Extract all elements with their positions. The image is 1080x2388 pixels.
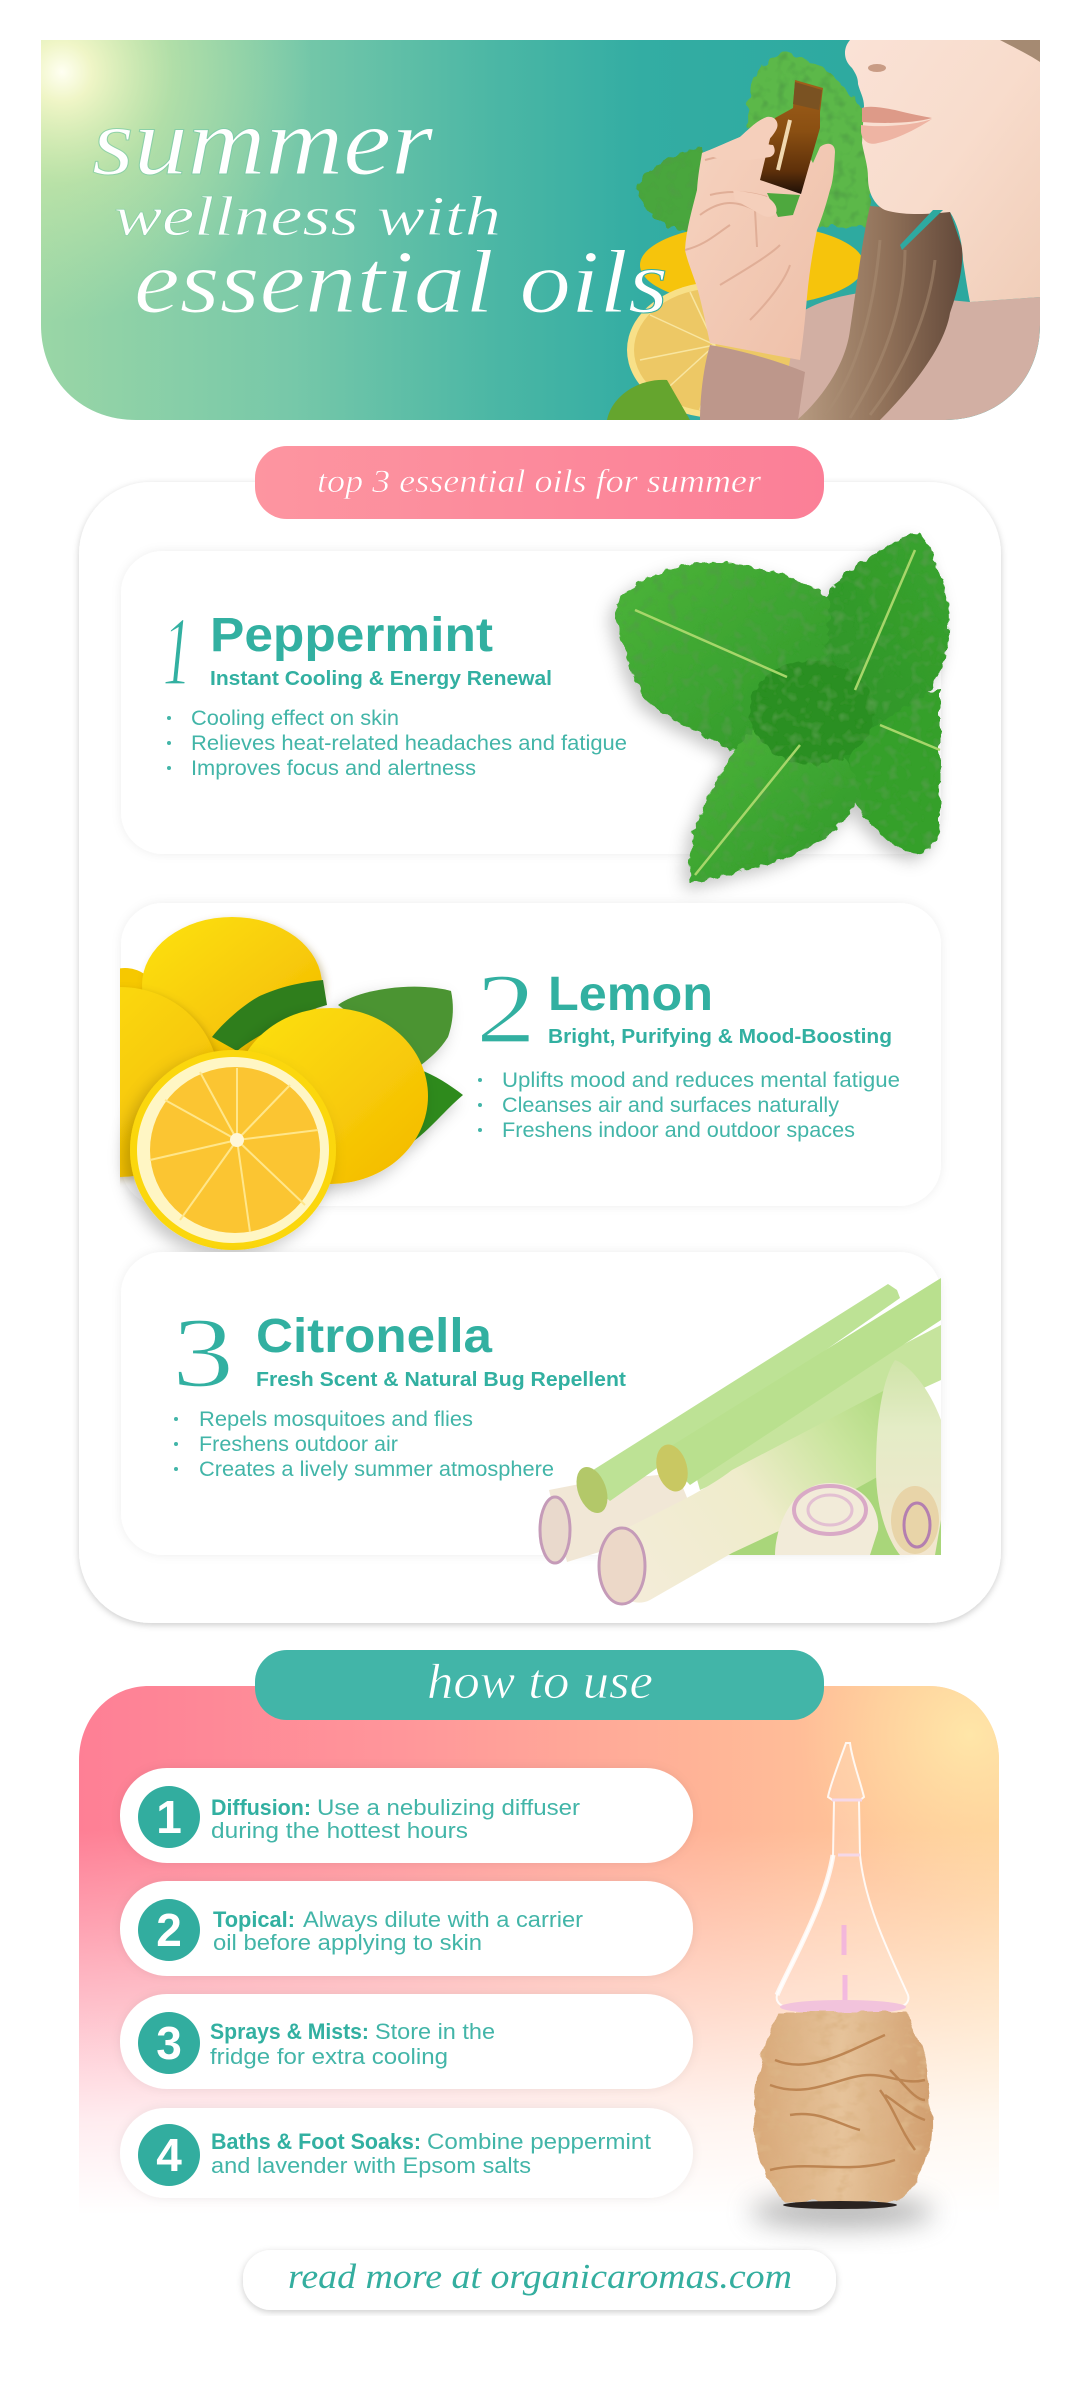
heading pill: how to use (255, 1650, 824, 1720)
bullet list: Relieves heat-related headaches and fatigue (191, 732, 627, 755)
footer link pill (243, 2250, 836, 2310)
text: during the hottest hours (211, 1818, 468, 1843)
title: essential oils (134, 233, 668, 332)
subheading: Fresh Scent & Natural Bug Repellent (256, 1369, 626, 1391)
text: Always dilute with a carrier (303, 1907, 583, 1932)
icon: number 1: 1 (163, 598, 191, 706)
row: topical (120, 1881, 693, 1976)
image: diffuser (750, 1743, 934, 2228)
text (213, 1907, 583, 1955)
heading: citronella: Citronella (256, 1310, 492, 1363)
bullet list: Repels mosquitoes and flies (199, 1408, 473, 1431)
footer link pill: read more at organicaromas.com (288, 2257, 792, 2296)
bullet list: Cleanses air and surfaces naturally (502, 1094, 839, 1117)
nostril (868, 64, 886, 72)
icon: number 2 (138, 1899, 200, 1961)
mint gap under bottle (767, 193, 800, 217)
hair at top right (1000, 40, 1040, 62)
bullet list: Freshens outdoor air (199, 1433, 398, 1456)
card: citronella (121, 1252, 945, 1604)
upright stalk (876, 1360, 941, 1555)
hand (685, 117, 835, 360)
bullet list (167, 707, 627, 780)
lemon and slice (607, 224, 864, 420)
heading: lemon: Lemon (548, 968, 713, 1021)
hair (797, 206, 962, 420)
sleeve (700, 345, 805, 420)
text (211, 1795, 580, 1843)
glass dome (777, 1743, 908, 2014)
text: Baths & Foot Soaks: (211, 2129, 421, 2154)
icon: number 1: 1 (156, 1791, 182, 1843)
fingers over bottle (702, 117, 778, 160)
bullet list: Creates a lively summer atmosphere (199, 1458, 554, 1481)
icon: number 4 (138, 2124, 200, 2186)
bullet list (478, 1069, 900, 1142)
bullet list: Improves focus and alertness (191, 757, 476, 780)
text: Store in the (375, 2019, 495, 2044)
bullet list: Cooling effect on skin (191, 707, 399, 730)
hero banner (41, 40, 1040, 420)
text: oil before applying to skin (213, 1930, 482, 1955)
icon: number 3: 3 (172, 1297, 234, 1408)
heading pill: top 3 essential oils: top 3 essential oils for summer (317, 464, 761, 500)
image: lemons (116, 915, 463, 1252)
card: lemon (21, 903, 941, 1250)
subheading: Instant Cooling & Energy Renewal (210, 668, 552, 690)
text: Sprays & Mists: (210, 2019, 369, 2044)
image: mint leaves (615, 530, 949, 883)
bottle (760, 80, 823, 194)
bullet list: Uplifts mood and reduces mental fatigue (502, 1069, 900, 1092)
icon: number 4: 4 (156, 2129, 182, 2181)
text: fridge for extra cooling (210, 2044, 448, 2069)
text: Topical: (213, 1907, 295, 1932)
cut onion slice (775, 1483, 878, 1555)
panel: top 3 oils (21, 482, 1001, 1623)
thick stalk (632, 1391, 884, 1603)
text: and lavender with Epsom salts (211, 2153, 531, 2178)
sweater (780, 292, 1040, 420)
row: baths and foot soaks (120, 2108, 693, 2198)
white stalk (549, 1473, 690, 1562)
card: peppermint (121, 530, 949, 883)
text (210, 2019, 495, 2069)
text: Use a nebulizing diffuser (317, 1795, 580, 1820)
text: Diffusion: (211, 1795, 311, 1820)
row: sprays and mists (120, 1994, 693, 2089)
wood base (754, 2012, 931, 2209)
text (211, 2129, 651, 2178)
lips (861, 107, 932, 144)
title: summer (92, 88, 434, 195)
heading: peppermint: Peppermint (210, 609, 493, 662)
icon: number 2: 2 (476, 953, 536, 1064)
heading pill: top 3 essential oils (255, 446, 824, 519)
title (92, 88, 668, 332)
row: diffusion (120, 1768, 693, 1863)
title: wellness with (114, 186, 501, 248)
icon: number 3 (138, 2012, 200, 2074)
face and neck (845, 40, 1040, 302)
panel: how to use (70, 1686, 1010, 2228)
icon: number 2: 2 (156, 1904, 182, 1956)
mint leaves behind bottle (637, 53, 873, 235)
text: Combine peppermint (427, 2129, 651, 2154)
icon: number 3: 3 (156, 2017, 182, 2069)
image: lemongrass (540, 1278, 945, 1604)
bullet list: Freshens indoor and outdoor spaces (502, 1119, 855, 1142)
bullet list (174, 1408, 554, 1481)
heading pill: how to use: how to use (427, 1653, 653, 1709)
icon: number 1 (138, 1786, 200, 1848)
teal gap (900, 210, 943, 250)
subheading: Bright, Purifying & Mood-Boosting (548, 1026, 892, 1048)
thin stalks (582, 1284, 900, 1501)
